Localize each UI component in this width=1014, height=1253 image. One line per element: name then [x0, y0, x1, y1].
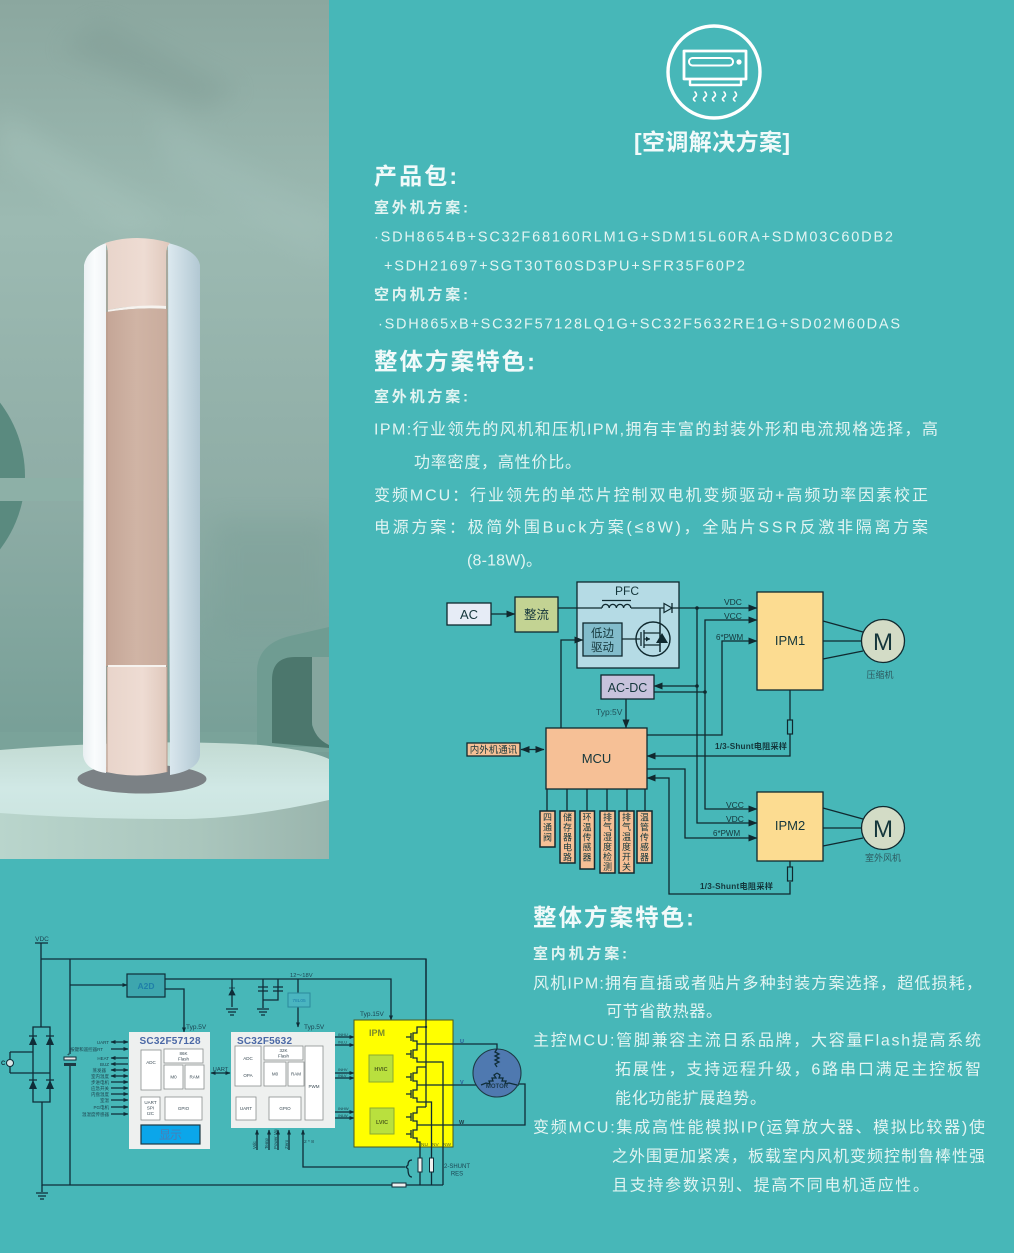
shunt resistors: 2-SHUNT: [444, 1164, 470, 1170]
input signal labels: 温湿度传感器: [82, 1111, 109, 1118]
text block: indoor features: 能化功能扩展趋势。: [615, 1090, 766, 1108]
PWM signals to IPM: INLV: [338, 1073, 347, 1078]
motor: compressor: M: [873, 629, 893, 656]
motor and phase wires: [417, 1039, 525, 1126]
skirting band: [0, 732, 329, 752]
wires: power and control: [547, 606, 792, 894]
arrow: comms to MCU: [521, 748, 544, 750]
chip: SC32F57128: RAM: [190, 1074, 200, 1080]
block: voltage regulator: [288, 993, 310, 1007]
heading: overall features outdoor: 整体方案特色:: [374, 348, 535, 374]
horizontal wall bar: [0, 478, 25, 501]
chip: SC32F57128: [129, 1032, 210, 1149]
block: rectifier: [515, 597, 558, 632]
chip bottom signals: Vdc: [252, 1140, 257, 1149]
PWM signals to IPM: INHW: [338, 1106, 349, 1111]
block: AC: [447, 603, 491, 625]
input signal labels: UART: [97, 1040, 109, 1045]
text block: indoor features: 风机IPM:拥有直插或者贴片多种封装方案选择，超低损耗，: [533, 974, 982, 992]
input signal labels: BUZ: [100, 1062, 109, 1067]
chip: SC32F57128: I2C: [147, 1111, 155, 1116]
chip: SC32F57128: Flash: [178, 1056, 189, 1062]
block: AC: AC: [460, 607, 478, 622]
PWM signals to IPM: [335, 1032, 354, 1118]
input signal labels: HEAT: [97, 1056, 109, 1061]
PWM signals to IPM: INHU: [338, 1032, 348, 1037]
block: PFC: [558, 582, 697, 668]
peripheral boxes: 温: [640, 812, 649, 822]
wire labels: VCC: [724, 611, 742, 621]
base plate: [78, 764, 206, 794]
outdoor unit block diagram: [447, 582, 904, 894]
wire labels: VCC: [726, 800, 744, 810]
chip bottom signals: Temp: [264, 1137, 269, 1149]
input signal labels: [70, 1040, 128, 1118]
text block: indoor features: 变频MCU:集成高性能模拟IP(运算放大器、模拟比较器)使: [533, 1118, 985, 1136]
chip: SC32F5632: OPA: [243, 1073, 253, 1078]
block: IPM module: LVIC: [376, 1120, 388, 1126]
block: IPM1: IPM1: [775, 633, 805, 648]
input signal labels: 室内温度: [91, 1073, 109, 1080]
block: AC-DC: [601, 675, 654, 699]
block: comms: 内外机通讯: [470, 744, 518, 756]
chip: SC32F57128: GPIO: [178, 1106, 190, 1111]
text block: product package: +SDH21697+SGT30T60SD3PU+SFR35F60P2: [384, 258, 745, 274]
voltage labels: Typ.5V: [186, 1024, 207, 1031]
block: IPM module: NV: [432, 1142, 439, 1148]
photo: floor-standing air conditioner: [0, 0, 329, 859]
block: MCU: MCU: [582, 751, 611, 766]
peripheral boxes: 感: [582, 842, 592, 852]
rectifier bridge: [1, 1027, 54, 1102]
wire labels: VDC: [726, 814, 744, 824]
text block: indoor features: 可节省散热器。: [606, 1002, 722, 1020]
heading: product package: 产品包:: [374, 163, 457, 189]
text block: outdoor features: IPM:行业领先的风机和压机IPM,拥有丰富的封装外形和电流规格选择，高: [374, 420, 938, 438]
motor and phase wires: U: [460, 1039, 464, 1045]
wire labels: Typ:5V: [596, 707, 623, 717]
peripheral boxes: 感: [640, 842, 649, 852]
unit: right blue panel: [168, 243, 200, 775]
motor and phase wires: W: [459, 1120, 465, 1126]
icon: air conditioner in circle: [668, 26, 760, 118]
motor: outdoor fan: [823, 806, 904, 863]
text block: product package: ·SDH865xB+SC32F57128LQ1G+SC32F5632RE1G+SD02M60DAS: [378, 316, 900, 332]
arrow: AC to rectifier: [491, 613, 515, 615]
voltage labels: 12～18V: [290, 973, 313, 979]
wires: supply rails: [35, 943, 443, 1199]
text block: product package: ·SDH8654B+SC32F68160RLM1G+SDM15L60RA+SDM03C60DB2: [374, 230, 893, 246]
chip: SC32F5632: M0: [272, 1072, 279, 1076]
chip bottom signals: [252, 1129, 314, 1150]
block: IPM module: NU: [421, 1142, 428, 1148]
chip: SC32F57128: SPI: [147, 1106, 154, 1110]
indoor unit circuit diagram: [1, 936, 525, 1199]
text block: indoor features: 室内机方案:: [533, 944, 627, 962]
input signal labels: 内盘温度: [91, 1091, 109, 1098]
text block: outdoor features: (8-18W)。: [467, 552, 542, 570]
chip: SC32F5632: 32K: [279, 1048, 288, 1053]
wire labels: VDC: [724, 597, 742, 607]
peripheral boxes: 传: [640, 832, 649, 842]
chip: SC32F5632: GPIO: [279, 1106, 291, 1111]
block: IPM module: [354, 959, 453, 1185]
wire labels: 6*PWM: [713, 829, 740, 838]
input signal labels: 应急开关: [91, 1085, 109, 1092]
block: IPM module: HVIC: [374, 1067, 388, 1073]
unit: white strip: [108, 306, 166, 312]
block: A2D: [127, 974, 165, 997]
text block: outdoor features: 功率密度，高性价比。: [414, 454, 581, 472]
wire labels: 6*PWM: [716, 633, 743, 642]
peripheral boxes: 测: [603, 862, 612, 872]
block: IPM2: IPM2: [775, 818, 805, 833]
block: A2D: A2D: [137, 981, 155, 991]
block: rectifier: 整流: [524, 607, 549, 622]
peripheral boxes: 存: [563, 822, 572, 832]
shunt resistors: RES: [451, 1172, 463, 1178]
motor: outdoor fan: 室外风机: [865, 852, 901, 863]
peripheral boxes: 湿: [603, 832, 612, 842]
block: PFC: 驱动: [591, 641, 614, 654]
wire labels: 1/3-Shunt电阻采样: [700, 881, 773, 891]
motor and phase wires: V: [460, 1080, 464, 1086]
block: IPM module: NW: [443, 1142, 451, 1148]
block: IPM1: [757, 592, 823, 690]
chip: SC32F5632: UART: [240, 1106, 252, 1111]
chip: SC32F5632: [231, 1032, 335, 1128]
peripheral boxes: 度: [603, 841, 612, 852]
motor: compressor: [823, 620, 904, 680]
block: voltage regulator: 78L05: [292, 998, 306, 1004]
peripheral boxes: 阀: [543, 832, 552, 842]
wire labels: 1/3-Shunt电阻采样: [715, 741, 787, 751]
block: PFC: 低边: [591, 627, 614, 640]
motor: outdoor fan: M: [873, 816, 893, 843]
peripheral boxes: 排: [622, 812, 631, 822]
peripheral boxes: 管: [640, 822, 649, 832]
peripheral boxes: 器: [582, 852, 592, 862]
text block: indoor features: 拓展性，支持远程升级，6路串口满足主控板智: [615, 1060, 981, 1078]
text block: indoor features: [533, 944, 985, 1194]
unit: gold panel edges: [107, 250, 167, 772]
text block: outdoor features: 电源方案：极简外围Buck方案(≤8W)，全贴片SSR反激非隔离方案: [374, 518, 928, 536]
peripheral boxes: 开: [622, 852, 631, 862]
block: MCU: [546, 728, 647, 789]
chip bottom signals: Zero: [284, 1139, 289, 1149]
motor and phase wires: MOTOR: [486, 1084, 509, 1090]
peripheral boxes: 器: [563, 832, 572, 842]
chip: SC32F57128: 显示: [159, 1128, 182, 1142]
peripheral boxes: 传: [582, 832, 592, 842]
unit: left white panel: [83, 243, 106, 773]
VDC label: VDC: [35, 936, 49, 943]
voltage labels: Typ.15V: [360, 1011, 385, 1018]
shunt resistors: [303, 1130, 470, 1187]
input signal labels: 室温: [100, 1097, 109, 1104]
text block: outdoor features: [374, 388, 938, 570]
peripheral boxes: 关: [622, 861, 631, 872]
peripheral boxes: [540, 811, 652, 873]
chip: SC32F57128: UART: [144, 1100, 157, 1105]
block: IPM module: IPM: [369, 1028, 385, 1038]
peripheral boxes: 路: [563, 852, 572, 862]
chip bottom signals: Power Vg: [273, 1129, 278, 1149]
peripheral boxes: 通: [543, 822, 552, 832]
chip: SC32F57128: 86K: [179, 1051, 188, 1056]
peripheral boxes: 气: [622, 821, 631, 832]
voltage labels: [186, 973, 385, 1031]
peripheral boxes: 温: [622, 832, 631, 842]
rectifier bridge: C: [1, 1061, 6, 1067]
UART link: UART: [213, 1067, 229, 1073]
text block: product package: 空内机方案:: [374, 286, 468, 304]
input signal labels: 蒸发器: [92, 1067, 106, 1074]
block: AC-DC: AC-DC: [608, 681, 647, 695]
input signal labels: PG电机: [93, 1104, 109, 1111]
chip: SC32F5632: ADC: [243, 1056, 253, 1061]
text block: product package: [374, 198, 900, 332]
block: PFC: PFC: [615, 584, 639, 598]
input signal labels: 步进电机: [91, 1079, 109, 1086]
chip: SC32F57128: M0: [170, 1074, 177, 1080]
wires: supply rails: +: [67, 1052, 70, 1058]
peripheral boxes: 环: [582, 812, 592, 822]
peripheral boxes: 排: [603, 812, 612, 822]
chip: SC32F57128: ADC: [146, 1060, 156, 1065]
peripheral boxes: 检: [603, 851, 612, 862]
chip: SC32F5632: PWM: [308, 1084, 320, 1089]
chip: SC32F5632: Flash: [278, 1054, 289, 1058]
text block: indoor features: 且支持参数识别、提高不同电机适应性。: [612, 1176, 929, 1194]
text block: indoor features: 之外围更加紧凑，板载室内风机变频控制鲁棒性强: [612, 1148, 985, 1166]
text block: indoor features: 主控MCU:管脚兼容主流日系品牌，大容量Flash提高系统: [533, 1032, 981, 1050]
PWM signals to IPM: INLW: [338, 1113, 348, 1118]
motor: compressor: 压缩机: [866, 669, 894, 680]
text block: product package: 室外机方案:: [374, 198, 468, 216]
chip: SC32F57128: SC32F57128: [140, 1036, 201, 1047]
peripheral boxes: 器: [640, 852, 649, 862]
heading: overall features indoor: 整体方案特色:: [533, 904, 694, 930]
chip bottom signals: 2 * 8: [304, 1139, 314, 1145]
PWM signals to IPM: INHV: [338, 1067, 348, 1072]
chip: SC32F5632: RAM: [291, 1072, 301, 1076]
text block: outdoor features: 变频MCU：行业领先的单芯片控制双电机变频驱动+高频功率因素校正: [374, 486, 928, 504]
unit: lower rose panel: [106, 667, 167, 776]
PWM signals to IPM: INLU: [338, 1040, 347, 1044]
wire labels: [596, 597, 787, 891]
unit: grille: [106, 308, 167, 666]
chip: SC32F5632: SC32F5632: [237, 1036, 292, 1047]
block: IPM2: [757, 792, 823, 861]
dark circle wall decoration: [0, 402, 25, 550]
peripheral boxes: 四: [543, 812, 552, 822]
peripheral boxes: 度: [622, 841, 631, 852]
arch decoration: [257, 627, 329, 748]
pedestal: [0, 742, 329, 859]
text block: outdoor features: 室外机方案:: [374, 388, 468, 406]
voltage labels: Typ.5V: [304, 1024, 325, 1031]
input signal labels: 按键和遥控器RT: [70, 1046, 103, 1053]
peripheral boxes: 电: [563, 842, 572, 852]
unit: rose upper panel: [105, 238, 170, 310]
peripheral boxes: 温: [582, 822, 592, 832]
peripheral boxes: 气: [603, 821, 612, 832]
peripheral boxes: 储: [563, 812, 572, 822]
title: [空调解决方案]: [634, 129, 790, 155]
